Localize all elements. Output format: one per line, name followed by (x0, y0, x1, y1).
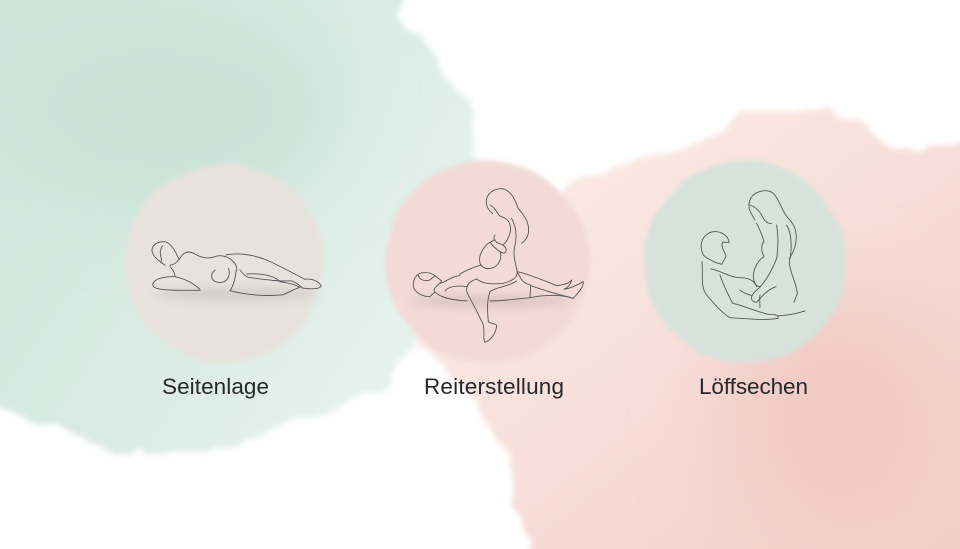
pink wash (380, 90, 960, 549)
label: Reiterstellung: Reiterstellung (424, 374, 564, 399)
label: Löffsechen: Löffsechen (699, 374, 808, 399)
icon: embracing couple (701, 191, 805, 319)
circle background: Löffsechen (644, 161, 846, 363)
circle background: Seitenlage (125, 164, 323, 362)
circle background: Reiterstellung (385, 160, 589, 364)
panel: Seitenlage (125, 164, 323, 362)
green wash (0, 0, 478, 457)
label: Seitenlage: Seitenlage (162, 374, 269, 399)
icon: side-lying figure (152, 242, 321, 295)
shadow under figure (154, 290, 318, 298)
shadow under figures (408, 297, 572, 305)
panel: Löffsechen (644, 161, 846, 363)
icon: seated pregnant figure over reclining figure (413, 189, 583, 342)
panel: Reiterstellung (385, 160, 589, 364)
